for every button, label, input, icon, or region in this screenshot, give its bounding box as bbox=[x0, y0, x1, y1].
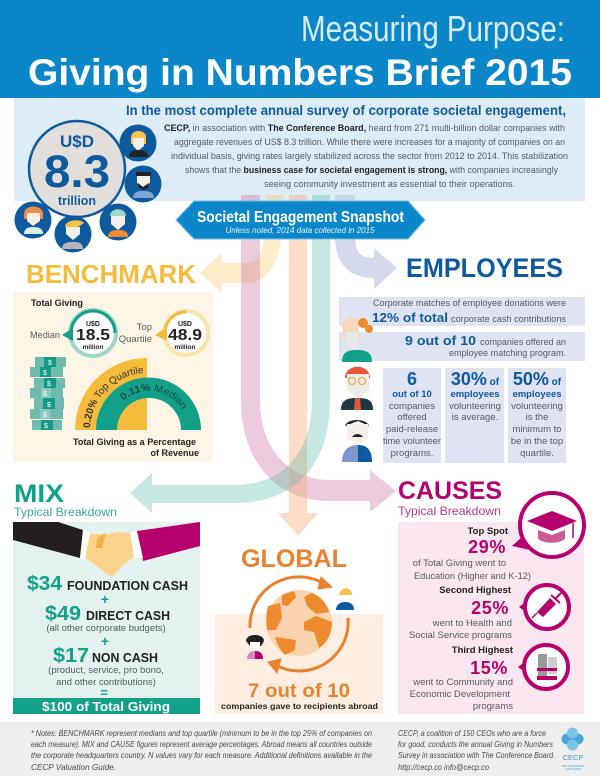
stat: matching program: 9 out of 10 bbox=[405, 333, 476, 348]
third highest text: went to Community and bbox=[412, 677, 513, 688]
banner: societal engagement snapshot bbox=[176, 201, 425, 239]
icon: person blonde woman bbox=[120, 124, 156, 162]
arrow: to global bbox=[278, 195, 318, 536]
icon: handshake bbox=[13, 522, 200, 577]
about cecp: Survey in association with The Conference Board. bbox=[398, 751, 555, 760]
third highest text: programs bbox=[473, 701, 513, 712]
chart: giving as percentage arcs: 0.20% Top Quartile bbox=[83, 366, 143, 428]
icon: money stack: $ bbox=[43, 412, 47, 419]
trillion badge bbox=[29, 121, 125, 217]
equals sign: = bbox=[100, 685, 108, 700]
banner title: Societal Engagement Snapshot bbox=[197, 209, 405, 226]
about cecp bbox=[398, 729, 555, 772]
top spot text: 29% bbox=[468, 537, 506, 557]
median circle: million bbox=[83, 344, 103, 351]
second highest text bbox=[409, 585, 512, 641]
icon: person bearded man bbox=[124, 166, 162, 202]
stat box: 6 out of 10: programs. bbox=[391, 448, 433, 459]
plus sign: + bbox=[101, 591, 109, 607]
footnotes: * Notes: BENCHMARK represent medians and top quartile (minimum to be in the top 25% of companies on bbox=[31, 729, 372, 738]
mix line 1 bbox=[27, 573, 188, 595]
icon: cecp logo: THE CEO FORCE bbox=[562, 764, 585, 768]
icon: person yellow hair man bbox=[54, 216, 92, 252]
stat: corporate matches: 12% of total bbox=[372, 310, 448, 325]
stat box: 6 out of 10: time volunteer bbox=[383, 436, 441, 447]
stat box: 50 percent: volunteering bbox=[511, 401, 563, 412]
stat box: 50 percent: be in the top bbox=[511, 436, 563, 447]
intro body text: CECP, in association with The Conference Board, heard from 271 multi-billion dollar companies with bbox=[164, 123, 565, 134]
icon: money stack: $ bbox=[43, 370, 47, 377]
intro body text: seeing community investment as essential to their operations. bbox=[264, 179, 515, 190]
heading: causes: CAUSES bbox=[398, 477, 502, 505]
heading: global: GLOBAL bbox=[241, 545, 347, 573]
top quartile label bbox=[119, 322, 152, 345]
about cecp: CECP, a coalition of 150 CEOs who are a force bbox=[398, 729, 546, 738]
median circle: 18.5 bbox=[76, 327, 110, 344]
second highest text: Second Highest bbox=[439, 585, 512, 596]
second highest text: went to Health and bbox=[432, 618, 512, 629]
footnotes: the corporate headquarters country. N values vary for each measure. Additional definitions available in the bbox=[31, 751, 372, 760]
panel: intro bbox=[14, 98, 585, 201]
mix line 3 bbox=[53, 645, 158, 667]
top quartile label: Quartile bbox=[119, 334, 152, 345]
stat box: 6 out of 10 bbox=[383, 368, 441, 463]
top quartile circle: million bbox=[175, 344, 195, 351]
total bar: $100 of Total Giving bbox=[42, 699, 170, 714]
median circle bbox=[62, 310, 116, 356]
mix line 3: $17 bbox=[53, 645, 89, 667]
stat box: 6 out of 10: 6 bbox=[407, 369, 417, 389]
stat box: 6 out of 10: paid-release bbox=[386, 424, 438, 435]
icon: money stack: $ bbox=[47, 402, 51, 409]
icon: buildings bbox=[518, 645, 568, 689]
icon: person orange hair woman bbox=[14, 202, 52, 238]
second highest text: 25% bbox=[471, 598, 509, 618]
arrow: to employees bbox=[335, 195, 397, 289]
mix line 2: $49 bbox=[45, 603, 81, 625]
stat box: 50 percent: 50% of bbox=[513, 369, 562, 389]
total bar bbox=[13, 698, 200, 714]
stat: 7 out of 10: 7 out of 10 bbox=[248, 681, 350, 702]
chart caption bbox=[73, 437, 199, 458]
icon: cecp logo: CECP bbox=[563, 753, 583, 762]
chart: giving as percentage arcs bbox=[75, 358, 201, 430]
median label: Median bbox=[30, 330, 60, 341]
top spot text: Education (Higher and K-12) bbox=[414, 571, 531, 582]
icon: person left bbox=[246, 635, 264, 659]
non cash note bbox=[48, 665, 164, 688]
intro body text: individual basis, giving rates largely stabilized across the sector from 2012 to 2014. This stabilization bbox=[171, 151, 568, 162]
icon: cecp logo bbox=[562, 728, 585, 771]
trillion badge: 8.3 bbox=[44, 146, 110, 197]
third highest text: Third Highest bbox=[452, 645, 514, 656]
icon: money stack: $ bbox=[44, 423, 48, 430]
intro heading: In the most complete annual survey of corporate societal engagement, bbox=[126, 102, 566, 118]
mix line 3: NON CASH bbox=[92, 651, 158, 665]
top quartile label: Top bbox=[137, 322, 152, 333]
panel: benchmark bbox=[13, 292, 213, 462]
icon: syringe bbox=[519, 585, 569, 629]
icon: money stack: $ bbox=[47, 381, 51, 388]
total giving label: Total Giving bbox=[31, 298, 83, 308]
icon: money stack: $ bbox=[43, 391, 47, 398]
panel: mix bbox=[13, 522, 200, 714]
heading: employees: EMPLOYEES bbox=[406, 253, 563, 283]
second highest text: Social Service programs bbox=[409, 630, 512, 641]
icon: money stack bbox=[30, 357, 66, 430]
icon: man with moustache bbox=[342, 420, 372, 462]
footnotes: each measure). MIX and CAUSE figures represent average percentages. Abroad means all countries outside bbox=[31, 740, 372, 749]
arrow: to mix bbox=[130, 195, 330, 513]
top quartile circle: U$D bbox=[178, 321, 192, 328]
subheading: mix: Typical Breakdown bbox=[14, 505, 117, 519]
stat box: 50 percent: minimum to bbox=[512, 424, 562, 435]
stat box: 30 percent: volunteering bbox=[449, 401, 501, 412]
icon: graduation cap bbox=[512, 493, 584, 557]
footnotes: CECP Valuation Guide. bbox=[31, 763, 116, 772]
footer bbox=[0, 722, 600, 776]
non cash note: (product, service, pro bono, bbox=[48, 665, 164, 676]
stat box: 50 percent: is the bbox=[526, 412, 548, 423]
mix line 2: DIRECT CASH bbox=[86, 609, 170, 623]
non cash note: and other contributions) bbox=[56, 677, 156, 688]
third highest text: 15% bbox=[470, 658, 508, 678]
third highest text bbox=[410, 645, 514, 712]
median circle: U$D bbox=[86, 321, 100, 328]
stat box: 50 percent: quartile. bbox=[520, 448, 554, 459]
stat box: 50 percent bbox=[508, 368, 566, 463]
icon: cecp logo: FOR GOOD bbox=[565, 767, 581, 771]
subheading: causes: Typical Breakdown bbox=[398, 504, 501, 518]
top spot text: Top Spot bbox=[468, 526, 509, 537]
panel: employees bbox=[339, 297, 585, 463]
arrow: to benchmark bbox=[200, 195, 284, 293]
icon: money stack: $ bbox=[48, 360, 52, 367]
trillion badge: U$D bbox=[60, 132, 94, 151]
direct cash note: (all other corporate budgets) bbox=[46, 623, 166, 634]
plus sign: + bbox=[101, 633, 109, 649]
stat box: 50 percent: employees bbox=[512, 389, 562, 400]
arrow: ring top bbox=[250, 577, 332, 628]
intro body text: aggregate revenues of US$ 8.3 trillion. While there were increases for a majority of companies on an bbox=[174, 137, 565, 148]
about cecp: http://cecp.co info@cecp.co bbox=[398, 763, 489, 772]
top spot text bbox=[413, 526, 531, 582]
header band bbox=[0, 0, 600, 98]
arrow: to causes bbox=[241, 195, 396, 512]
footnotes bbox=[31, 729, 372, 772]
icon: person green cap bbox=[100, 204, 136, 240]
chart caption: of Revenue bbox=[150, 448, 199, 458]
heading: benchmark: BENCHMARK bbox=[26, 259, 196, 289]
stat: corporate matches: corporate cash contributions bbox=[451, 314, 566, 325]
mix line 1: $34 bbox=[27, 573, 63, 595]
stat box: 30 percent: employees bbox=[450, 389, 500, 400]
top quartile circle: 48.9 bbox=[168, 327, 202, 344]
trillion badge: trillion bbox=[58, 194, 96, 208]
stat: corporate matches: Corporate matches of employee donations were bbox=[373, 298, 566, 309]
stat: matching program: employee matching program. bbox=[449, 348, 566, 359]
third highest text: Economic Development bbox=[410, 689, 510, 700]
stat: corporate matches bbox=[372, 298, 566, 325]
arrow: ring bottom bbox=[268, 618, 348, 673]
stat caption: companies gave to recipients abroad bbox=[221, 701, 378, 711]
mix line 2 bbox=[45, 603, 170, 625]
chart: giving as percentage arcs: 0.11% Median bbox=[120, 384, 186, 409]
intro body text bbox=[164, 123, 568, 190]
stat: matching program bbox=[405, 333, 566, 359]
icon: globe bbox=[266, 590, 332, 656]
intro body text: shows that the business case for societal engagement is strong, with companies increasingly bbox=[185, 165, 558, 176]
top spot text: of Total Giving went to bbox=[413, 558, 506, 569]
stat box: 30 percent: is average. bbox=[452, 412, 498, 423]
panel: global bbox=[215, 577, 383, 714]
stat: matching program: companies offered an bbox=[480, 337, 566, 348]
stat box: 6 out of 10: companies bbox=[389, 401, 435, 412]
chart caption: Total Giving as a Percentage bbox=[73, 437, 196, 447]
heading: mix: MIX bbox=[14, 480, 64, 508]
stat box: 30 percent: 30% of bbox=[451, 369, 500, 389]
icon: person right bbox=[336, 588, 354, 610]
mix line 1: FOUNDATION CASH bbox=[67, 579, 188, 593]
stat box: 6 out of 10: out of 10 bbox=[392, 389, 432, 400]
banner subtitle: Unless noted, 2014 data collected in 2015 bbox=[226, 226, 375, 235]
top quartile circle bbox=[155, 311, 208, 355]
panel: causes bbox=[398, 493, 584, 714]
stat box: 30 percent bbox=[445, 368, 504, 463]
title line 2: Giving in Numbers Brief 2015 bbox=[28, 52, 572, 93]
icon: man with glasses bbox=[341, 367, 373, 410]
about cecp: for good, conducts the annual Giving in Numbers bbox=[398, 740, 553, 749]
icon: woman orange bun bbox=[342, 318, 373, 362]
stat box: 6 out of 10: offered bbox=[397, 412, 427, 423]
